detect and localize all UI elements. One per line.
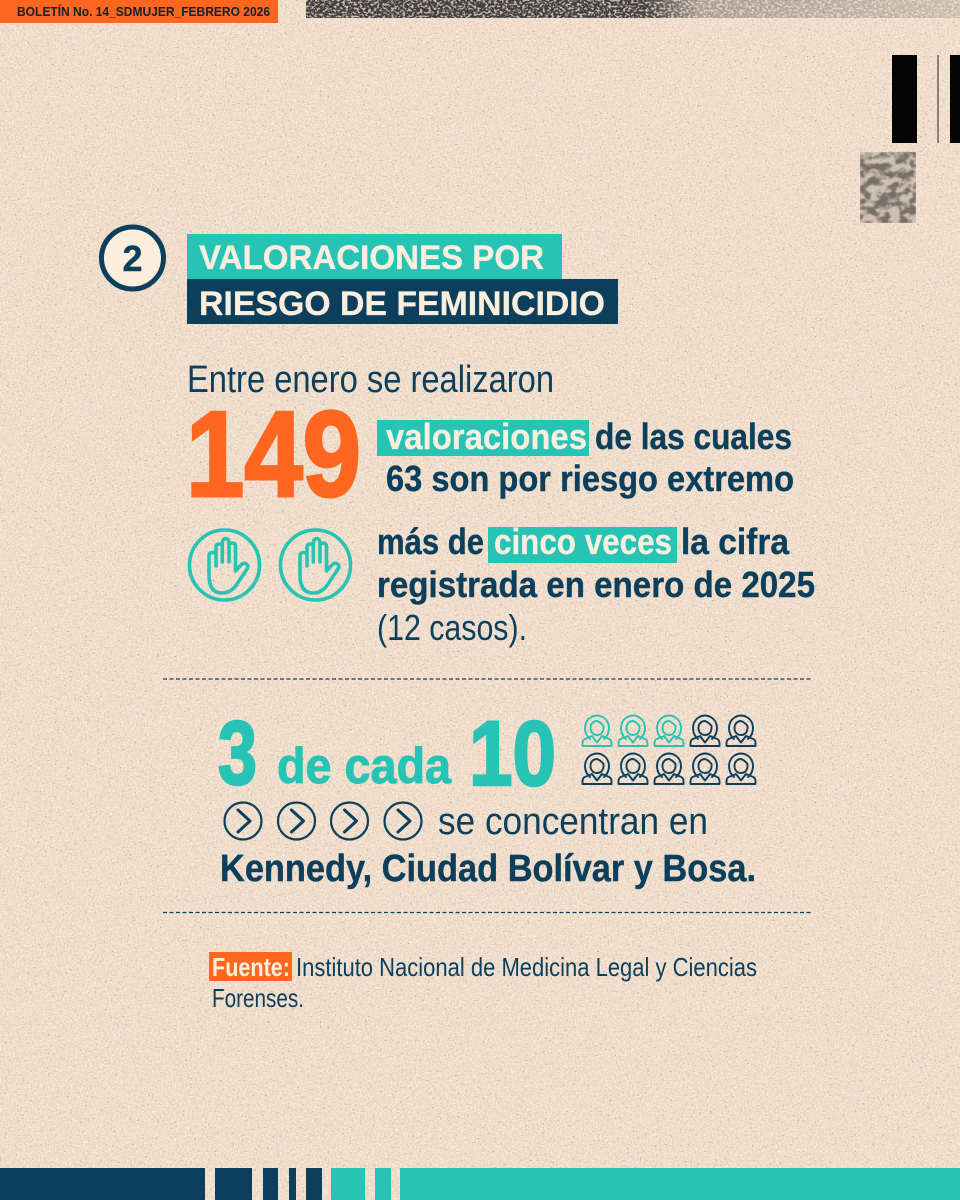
- comparison text block: registrada en enero de 2025: [377, 564, 815, 605]
- icon: stop hand 1: [190, 530, 260, 600]
- bulletin tag: BOLETÍN No. 14_SDMUJER_FEBRERO 2026: [17, 4, 270, 19]
- arrow 1: [224, 802, 262, 840]
- section number badge: 2: [122, 238, 143, 279]
- arrow 3: [331, 802, 368, 840]
- icon: woman 1: [582, 716, 612, 746]
- icon: woman 3: [654, 716, 684, 746]
- valoraciones text block: 63 son por riesgo extremo: [386, 458, 794, 499]
- icon: woman 9: [690, 754, 720, 784]
- comparison text block: cinco veces: [494, 521, 672, 562]
- icon: woman 10: [726, 754, 756, 784]
- bulletin tag: [0, 0, 278, 23]
- arrow icons row: [224, 802, 422, 840]
- comparison text block: más de: [377, 521, 484, 562]
- heading: [187, 234, 618, 324]
- statistic 3 de cada 10: 10: [469, 703, 556, 805]
- valoraciones text block: [377, 416, 794, 499]
- icons: ten women, three highlighted: [582, 716, 756, 784]
- icon: woman 6: [582, 754, 612, 784]
- statistic 3 de cada 10: de cada: [277, 738, 452, 794]
- heading: VALORACIONES POR: [199, 239, 544, 277]
- valoraciones text block: valoraciones: [386, 416, 587, 457]
- footer colour bars: [0, 1168, 960, 1200]
- icon: woman 7: [618, 754, 648, 784]
- distressed black bars top right: [860, 55, 960, 223]
- source note: Instituto Nacional de Medicina Legal y Ciencias: [296, 952, 757, 982]
- valoraciones text block: de las cuales: [595, 416, 792, 457]
- source note: Fuente:: [212, 952, 290, 982]
- arrow 2: [278, 802, 315, 840]
- icon: woman 8: [654, 754, 684, 784]
- concentration text: se concentran en: [438, 801, 708, 843]
- section number badge: [102, 227, 164, 289]
- intro text: Entre enero se realizaron: [187, 359, 554, 401]
- concentration text: Kennedy, Ciudad Bolívar y Bosa.: [220, 848, 756, 890]
- comparison text block: la cifra: [681, 521, 790, 562]
- big number 149: 149: [186, 386, 361, 522]
- distressed top strip: [306, 0, 960, 18]
- comparison text block: (12 casos).: [377, 607, 527, 648]
- concentration text: [220, 801, 756, 890]
- icon: woman 5: [726, 716, 756, 746]
- arrow 4: [384, 802, 422, 840]
- icon: woman 2: [618, 716, 648, 746]
- heading: RIESGO DE FEMINICIDIO: [199, 285, 605, 323]
- statistic 3 de cada 10: [218, 703, 556, 805]
- comparison text block: [377, 521, 815, 648]
- icon: stop hand 2: [280, 530, 350, 600]
- source note: Forenses.: [212, 983, 304, 1013]
- statistic 3 de cada 10: 3: [218, 704, 257, 804]
- icon: woman 4: [690, 716, 720, 746]
- source note: [209, 952, 757, 1013]
